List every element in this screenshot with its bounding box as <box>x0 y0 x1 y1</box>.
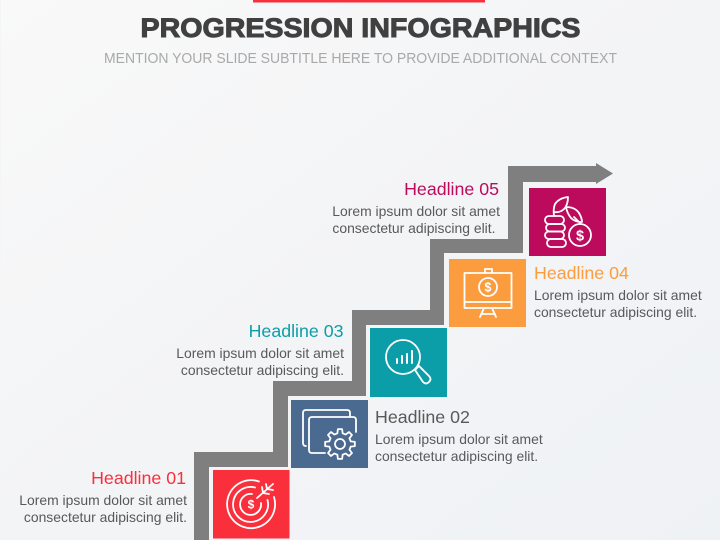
text block: headline 04: consectetur adipiscing elit. <box>534 304 697 320</box>
step 3: teal tile with magnifier icon <box>370 328 447 397</box>
text block: headline 01: consectetur adipiscing elit. <box>24 509 187 525</box>
icon: target: $ <box>248 498 255 512</box>
step 4: orange tile with presentation icon <box>449 259 526 327</box>
text block: headline 02: Headline 02 <box>375 407 470 427</box>
staircase arrow <box>194 163 613 540</box>
text block: headline 05 <box>332 179 500 236</box>
step 2: blue tile with windows and gear icon <box>291 400 368 468</box>
icon: presentation board: $ <box>485 280 492 294</box>
top accent bar <box>253 0 485 2</box>
text block: headline 02: Lorem ipsum dolor sit amet <box>375 431 543 447</box>
title: PROGRESSION INFOGRAPHICS <box>140 13 580 43</box>
text block: headline 04: Headline 04 <box>534 263 629 283</box>
icon: coins and plant: $ <box>576 228 584 244</box>
step 5: magenta tile with coins and plant icon <box>529 188 606 256</box>
text block: headline 01 <box>19 468 187 525</box>
text block: headline 03: Lorem ipsum dolor sit amet <box>176 345 344 361</box>
text block: headline 01: Headline 01 <box>91 468 186 488</box>
text block: headline 05: Headline 05 <box>404 179 499 199</box>
icon: windows and gear <box>303 410 356 459</box>
subtitle: MENTION YOUR SLIDE SUBTITLE HERE TO PROVIDE ADDITIONAL CONTEXT <box>104 51 617 67</box>
text block: headline 03 <box>176 321 344 378</box>
text block: headline 04 <box>534 263 702 320</box>
text block: headline 05: consectetur adipiscing elit. <box>332 220 496 236</box>
text block: headline 05: Lorem ipsum dolor sit amet <box>332 203 500 219</box>
icon: magnifier with bars <box>386 340 430 384</box>
text block: headline 03: Headline 03 <box>249 321 344 341</box>
text block: headline 04: Lorem ipsum dolor sit amet <box>534 287 702 303</box>
text block: headline 03: consectetur adipiscing elit. <box>181 362 344 378</box>
step 1: red tile with target icon <box>213 470 290 538</box>
text block: headline 02: consectetur adipiscing elit. <box>375 448 538 464</box>
text block: headline 02 <box>375 407 543 464</box>
text block: headline 01: Lorem ipsum dolor sit amet <box>19 492 187 508</box>
